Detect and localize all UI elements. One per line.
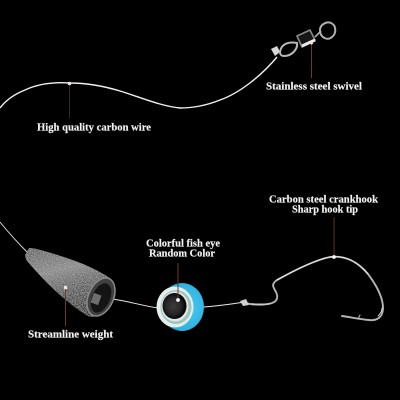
label: streamline weight: Streamline weight [28, 328, 113, 340]
icon: fish eye bead [156, 283, 204, 331]
icon: streamline weight [25, 248, 121, 320]
callout: swivel marker [310, 42, 313, 78]
label: high quality carbon wire: High quality carbon wire [37, 122, 151, 134]
label: stainless steel swivel: Stainless steel swivel [266, 80, 362, 92]
callout: fish eye marker [176, 263, 180, 302]
callout: carbon wire marker [68, 82, 71, 118]
callout: weight marker [64, 286, 67, 326]
carbon wire lower [0, 222, 245, 308]
label: colorful fish eye: Random Color [149, 248, 215, 260]
icon: swivel [271, 22, 335, 56]
callout: hook marker [332, 217, 336, 259]
label: colorful fish eye [146, 238, 220, 260]
label: carbon steel crankhook: Carbon steel crankhook [269, 194, 379, 206]
icon: crank hook [240, 257, 383, 320]
label: carbon steel crankhook [269, 194, 379, 216]
label: colorful fish eye: Colorful fish eye [146, 238, 220, 250]
label: carbon steel crankhook: Sharp hook tip [292, 204, 358, 216]
carbon wire upper [0, 57, 277, 108]
